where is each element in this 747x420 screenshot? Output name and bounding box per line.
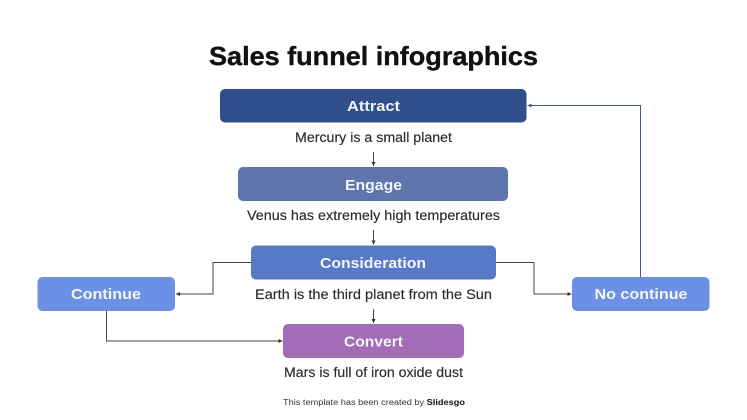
text: Mars description: Mars is full of iron oxide dust (284, 365, 463, 380)
branch: Continue (38, 277, 175, 311)
text: Venus description: Venus has extremely high temperatures (247, 208, 500, 223)
branch: Continue: Continue (71, 286, 141, 303)
arrow: Consideration to Convert (372, 309, 374, 323)
text: Mercury description: Mercury is a small planet (295, 130, 452, 145)
arrow: Consideration to Continue (176, 262, 251, 294)
arrow: No continue back to Attract (528, 106, 640, 277)
arrow: Consideration to No continue (496, 262, 572, 294)
footer credit: This template has been created by Slidesgo (283, 398, 465, 407)
step: Attract: Attract (347, 98, 400, 115)
text: Earth description: Earth is the third planet from the Sun (255, 287, 492, 302)
step: Attract (220, 89, 526, 122)
step: Convert: Convert (344, 334, 403, 350)
arrow: Continue to Convert (106, 311, 282, 341)
step: Engage: Engage (345, 177, 402, 194)
branch: No continue (572, 277, 710, 311)
step: Convert (283, 324, 464, 358)
step: Engage (238, 167, 508, 201)
step: Consideration: Consideration (320, 255, 426, 272)
arrow: Engage to Consideration (372, 230, 374, 244)
step: Consideration (251, 246, 496, 280)
branch: No continue: No continue (594, 286, 688, 303)
title: Sales funnel infographics (209, 41, 538, 71)
arrow: Attract to Engage (372, 152, 374, 166)
